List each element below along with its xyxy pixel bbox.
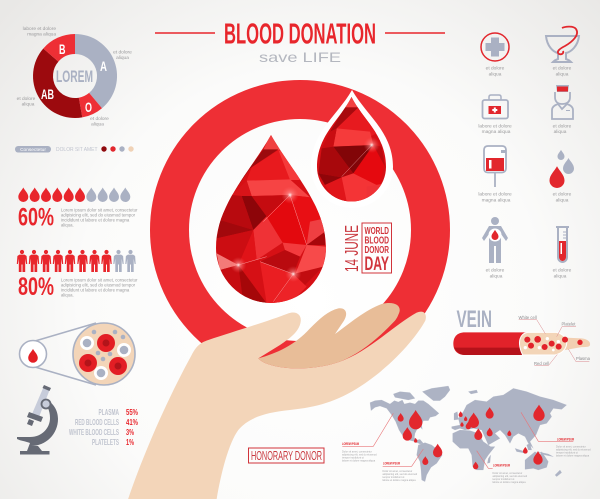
small drop white halo xyxy=(311,90,393,208)
map callout 3: labore et dolore magna aliqua xyxy=(492,481,526,484)
icon: medical cross: et dolore xyxy=(486,66,505,72)
legend: Consectetur xyxy=(20,147,46,153)
donut chart: labore et dolore xyxy=(23,26,56,32)
world blood donor day badge: BLOOD xyxy=(364,234,389,246)
world blood donor day badge: WORLD xyxy=(364,225,389,237)
icon: nurse: et dolore xyxy=(553,124,572,130)
blood composition table: PLASMA xyxy=(98,407,119,417)
icon: medical kit: magna aliqua xyxy=(482,129,511,135)
blood composition table: 55% xyxy=(126,407,138,417)
drops pictogram 60%: aliqua. xyxy=(61,222,74,228)
people pictogram 80%: 80% xyxy=(18,273,54,301)
people pictogram 80% xyxy=(17,250,138,301)
donut chart: LOREM xyxy=(56,67,93,86)
blood composition table: 41% xyxy=(126,417,138,427)
map callout 3: Dolor sit amet, consectetur xyxy=(492,472,522,475)
icon: test tube xyxy=(553,226,572,280)
drops pictogram 60%: incididunt ut labore et dolore magna xyxy=(61,218,130,222)
map callout 2: adipisicing elit, sed do eiusmod xyxy=(382,473,418,476)
map callout 2 xyxy=(382,462,418,482)
icon: test tube: aliqua xyxy=(554,274,567,280)
blood cells magnifier xyxy=(20,323,135,385)
map callout 2: tempor incididunt ut xyxy=(382,476,405,479)
icon: medical cross: aliqua xyxy=(489,72,502,78)
vein diagram xyxy=(453,320,590,366)
map callout 1: LOREM IPSUM xyxy=(342,442,359,446)
donut chart: aliqua xyxy=(22,102,35,108)
map callout 4: tempor incididunt ut xyxy=(556,452,578,454)
map callout 4: adipisicing elit, sed do eiusmod xyxy=(556,448,591,452)
icon: three drops: aliqua xyxy=(556,198,569,204)
world blood donor day badge: 14 JUNE xyxy=(342,225,362,272)
blood composition table: RED BLOOD CELLS xyxy=(75,417,119,427)
drops pictogram 60%: 60% xyxy=(18,204,54,232)
blood composition table xyxy=(69,407,138,447)
icon: medical kit xyxy=(478,95,512,135)
world blood donor day badge: DONOR xyxy=(364,244,389,256)
map callout 1: Dolor sit amet, consectetur xyxy=(342,450,372,454)
world map continents xyxy=(370,386,567,482)
icon: three drops xyxy=(550,150,574,204)
icon: microscope xyxy=(17,385,58,454)
icon: bowl of hygieia xyxy=(546,27,579,78)
blood composition table: PLATELETS xyxy=(92,437,119,447)
people pictogram 80%: adipisicing elit, sed do eiusmod tempor xyxy=(61,282,136,288)
drops pictogram 60% xyxy=(18,188,138,232)
icon: bowl of hygieia: aliqua xyxy=(556,72,569,78)
icon: bowl of hygieia: et dolore xyxy=(553,66,572,72)
blood composition table: 3% xyxy=(126,427,134,437)
map callout 4: Dolor sit amet, consectetur xyxy=(556,446,586,448)
subtitle: save LIFE xyxy=(259,49,341,65)
legend xyxy=(15,146,134,153)
world blood donor day badge: DAY xyxy=(364,254,389,275)
map callout 4: LOREM IPSUM xyxy=(557,438,574,442)
map callout 3: tempor incididunt ut xyxy=(492,478,515,481)
donut chart: et dolore xyxy=(90,116,109,122)
map callout 2: LOREM IPSUM xyxy=(383,462,400,466)
vein labels: Plasma xyxy=(576,356,591,361)
red ring xyxy=(170,100,430,360)
large faceted drop xyxy=(216,135,326,303)
icon: blood bag: magna aliqua xyxy=(482,198,511,204)
icon: medical cross xyxy=(481,33,509,78)
map callout 1: labore et dolore magna aliqua xyxy=(342,460,376,462)
icon: person with blood drop: aliqua xyxy=(490,274,503,280)
people pictogram 80%: incididunt ut labore et dolore magna xyxy=(61,288,130,292)
donut chart: et dolore xyxy=(17,96,36,102)
donut chart: A xyxy=(100,58,107,74)
icon: blood bag xyxy=(478,146,512,204)
map callout 3: LOREM IPSUM xyxy=(493,464,510,468)
vein labels xyxy=(518,315,591,366)
donut chart: aliqua xyxy=(116,55,129,61)
hand xyxy=(127,303,426,499)
honorary donor badge: HONORARY DONOR xyxy=(251,448,322,463)
blood composition table: 1% xyxy=(126,437,134,447)
vein labels: Red cell xyxy=(534,361,549,366)
map callout 4 xyxy=(556,438,591,458)
honorary donor badge xyxy=(248,448,324,463)
world blood donor day badge xyxy=(342,223,392,275)
map callout 3 xyxy=(492,464,528,484)
vein heading: VEIN xyxy=(456,306,492,333)
blood composition table: WHITE BLOOD CELLS xyxy=(69,427,119,437)
map callout 2: labore et dolore magna aliqua xyxy=(382,479,416,482)
donut chart: magna aliqua xyxy=(27,32,56,38)
icon: blood bag: labore et dolore xyxy=(478,192,512,198)
map callout 4: labore et dolore magna aliqua xyxy=(556,454,590,458)
drops pictogram 60%: adipisicing elit, sed do eiusmod tempor xyxy=(61,212,136,218)
icon: test tube: et dolore xyxy=(553,268,572,274)
donut chart: B xyxy=(59,41,66,57)
title: BLOOD DONATION xyxy=(224,18,376,50)
vein labels: Platelet xyxy=(562,322,576,326)
people pictogram 80%: Lorem ipsum dolor sit amet, consectetur xyxy=(61,278,138,282)
map callout 2: Dolor sit amet, consectetur xyxy=(382,470,412,473)
icon: person with blood drop xyxy=(482,217,508,280)
donut chart: aliqua xyxy=(91,122,104,128)
icon: person with blood drop: et dolore xyxy=(486,268,505,274)
map callout 1: adipisicing elit, sed do eiusmod xyxy=(342,454,377,456)
people pictogram 80%: aliqua. xyxy=(61,292,74,298)
donut chart: O xyxy=(85,99,92,115)
vein labels: White cell xyxy=(518,315,537,320)
donut chart: et dolore xyxy=(113,50,132,56)
icon: nurse xyxy=(552,85,573,135)
legend: DOLOR SIT AMET xyxy=(56,147,98,153)
world map drops and leader lines xyxy=(342,405,573,469)
drops pictogram 60%: Lorem ipsum dolor sit amet, consectetur xyxy=(61,208,138,212)
icon: nurse: aliqua xyxy=(554,129,567,135)
icon: medical kit: labore et dolore xyxy=(478,124,512,130)
map callout 1: tempor incididunt ut xyxy=(342,456,364,460)
donut chart: AB xyxy=(41,86,54,102)
donut chart xyxy=(17,26,132,128)
small faceted drop xyxy=(317,97,386,202)
map callout 3: adipisicing elit, sed do eiusmod xyxy=(492,475,528,478)
map callout 1 xyxy=(342,442,377,462)
icon: three drops: et dolore xyxy=(553,192,572,198)
